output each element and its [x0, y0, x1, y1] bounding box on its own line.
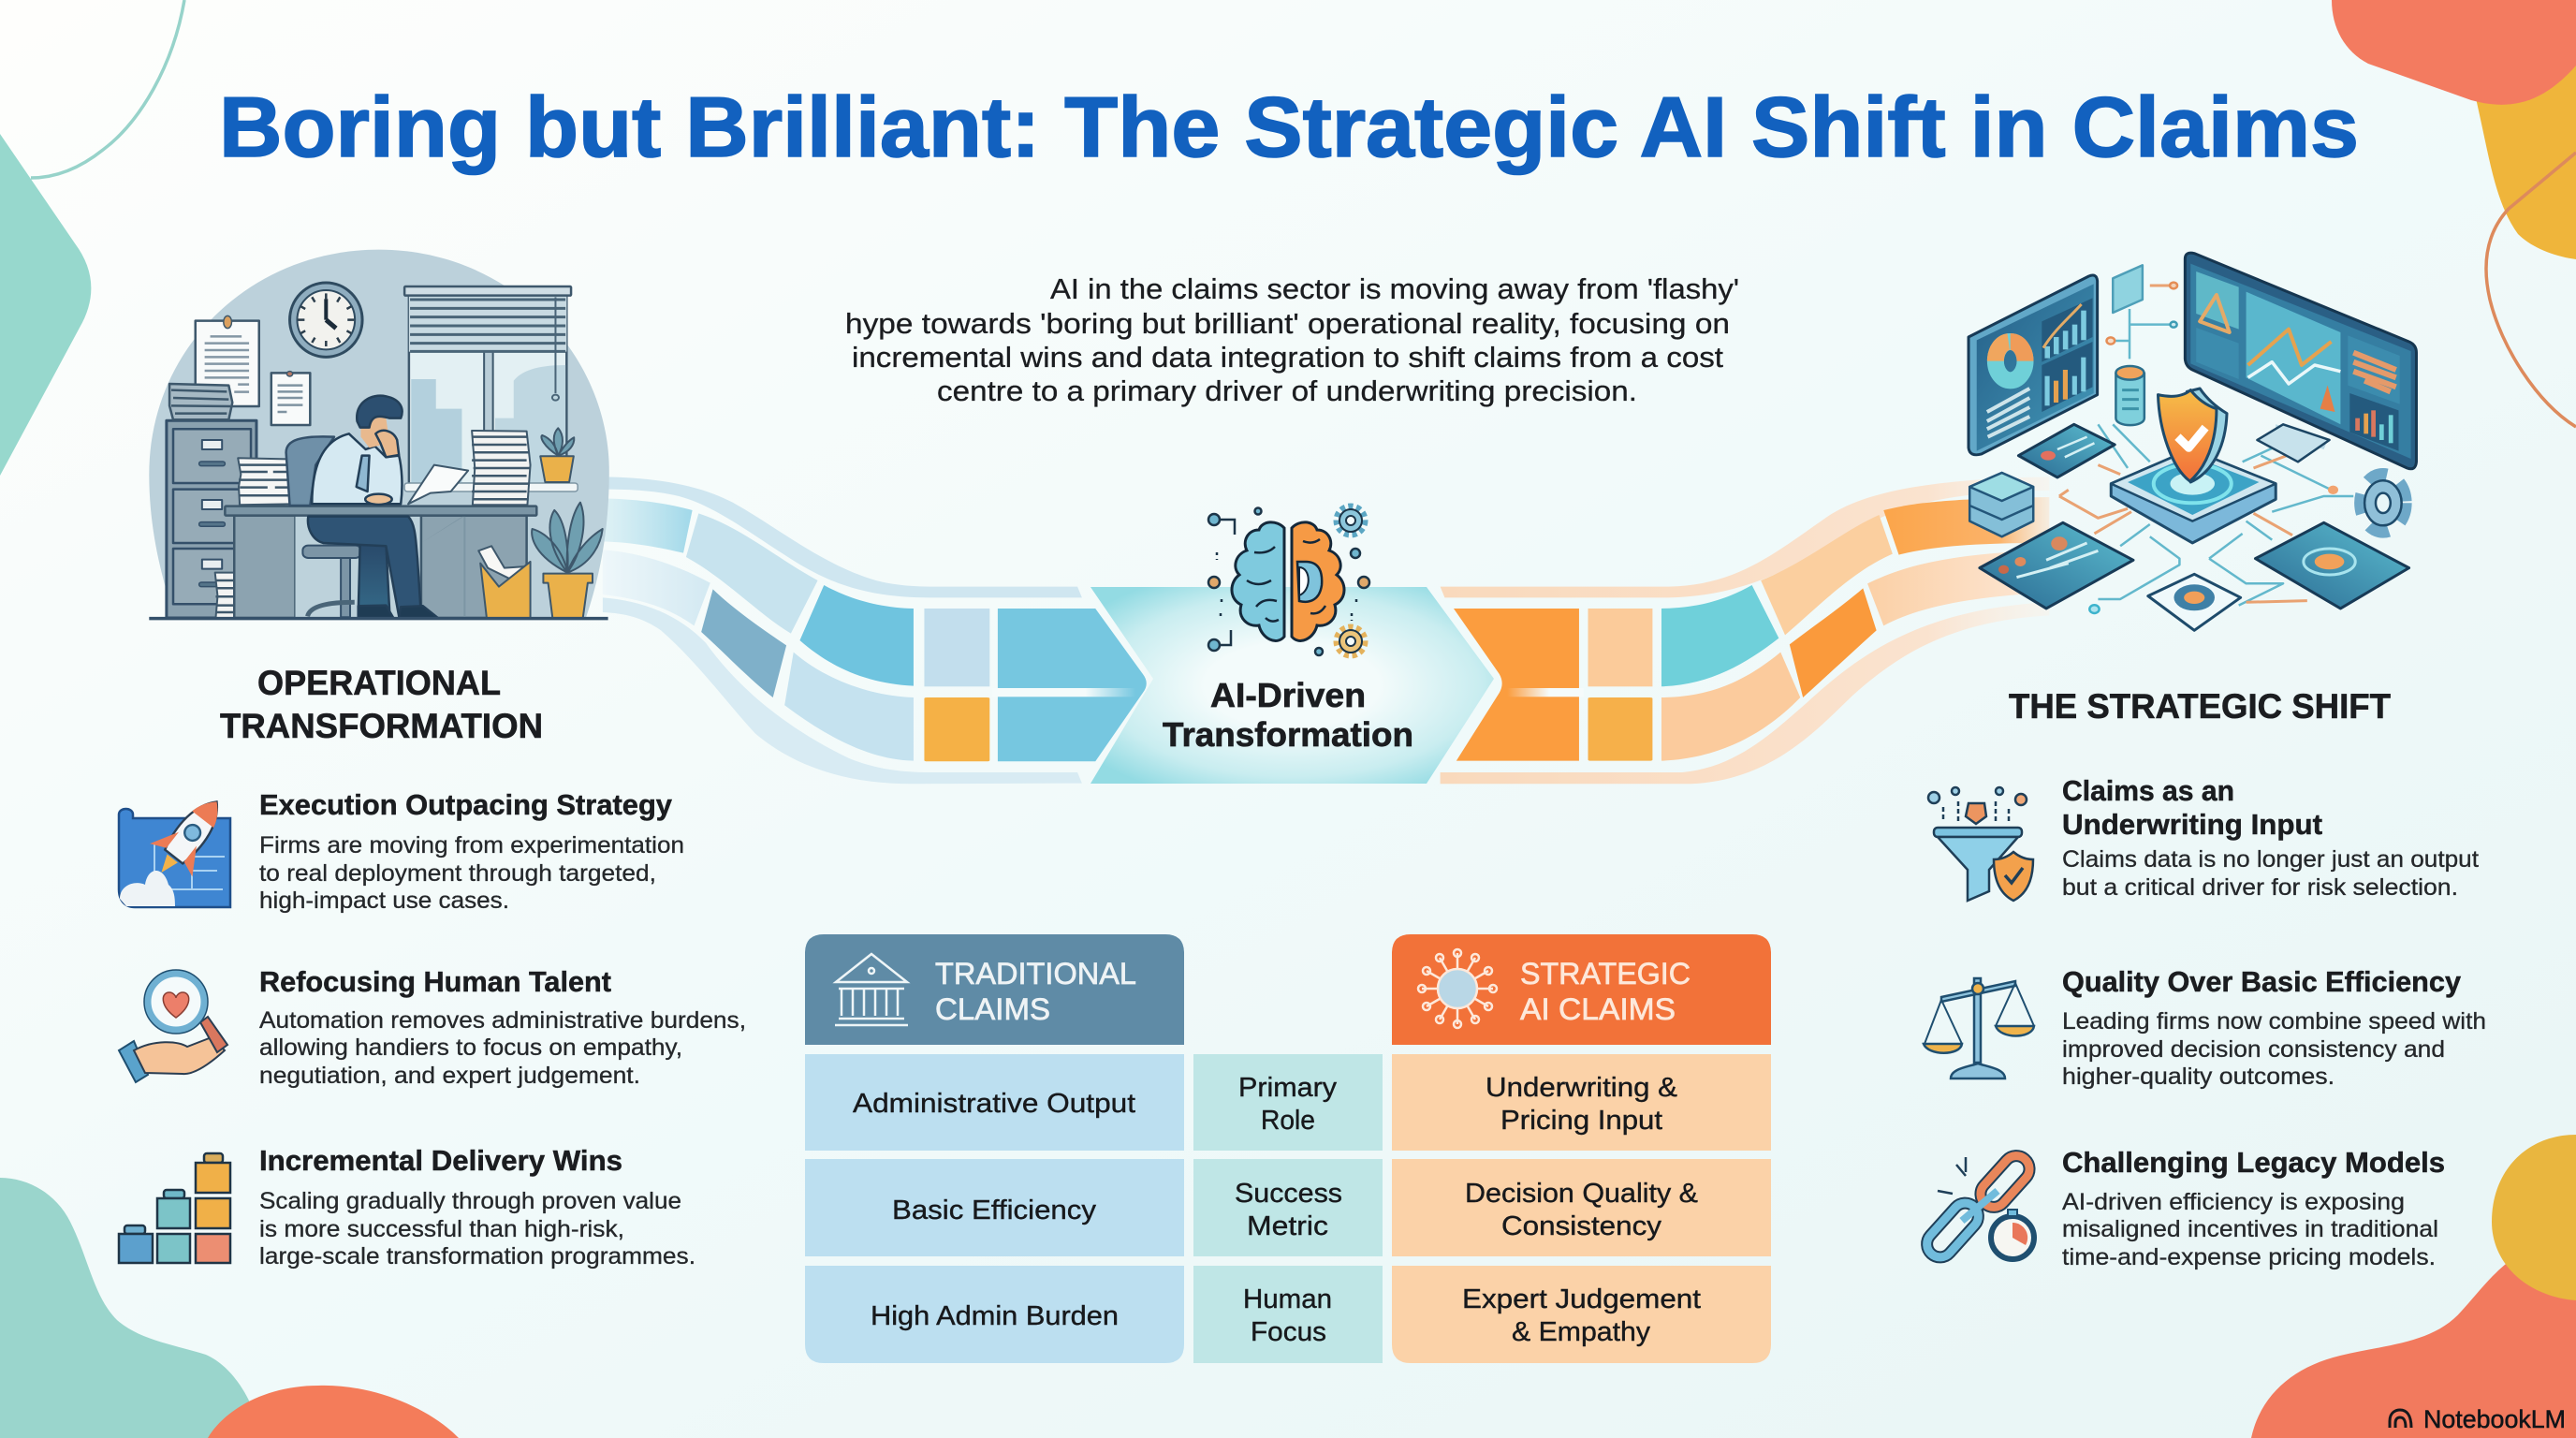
header: traditional claims — [805, 934, 1184, 1045]
circuit lines — [2059, 283, 2353, 613]
security shield — [2158, 389, 2227, 482]
right item: challenging legacy models: time-and-expense pricing models. — [2062, 1244, 2436, 1270]
criteria column cells: Focus — [1251, 1317, 1326, 1347]
office chair — [286, 436, 360, 617]
intro text block: incremental wins and data integration to shift claims from a cost — [852, 341, 1723, 374]
right item: quality over basic efficiency: higher-quality outcomes. — [2062, 1064, 2334, 1090]
left item: execution outpacing strategy: Execution Outpacing Strategy — [259, 788, 673, 821]
strategic column cells: Decision Quality & — [1465, 1179, 1698, 1209]
traditional column cells: Basic Efficiency — [892, 1196, 1097, 1225]
center label — [1163, 676, 1413, 754]
waste bin — [478, 546, 531, 618]
traditional column cells: High Admin Burden — [871, 1301, 1119, 1331]
right item: quality over basic efficiency: Quality Over Basic Efficiency — [2062, 965, 2462, 998]
heading: the strategic shift: THE STRATEGIC SHIFT — [2009, 687, 2391, 726]
heading: operational transformation — [220, 664, 543, 745]
small gear card — [2148, 574, 2241, 630]
icon: rocket on blueprint — [119, 785, 238, 907]
window plant — [540, 428, 574, 482]
right item: challenging legacy models: AI-driven efficiency is exposing — [2062, 1189, 2405, 1215]
left item: refocusing human talent: negutiation, and expert judgement. — [259, 1063, 640, 1089]
title: Boring but Brilliant: The Strategic AI Shift in Claims — [219, 81, 2359, 175]
criteria column cells: Human — [1243, 1284, 1332, 1314]
right item: claims as an underwriting input: but a critical driver for risk selection. — [2062, 874, 2458, 901]
right item: claims as an underwriting input — [1928, 774, 2479, 901]
header: strategic AI claims: STRATEGIC — [1520, 957, 1690, 990]
left item: refocusing human talent: Automation removes administrative burdens, — [259, 1007, 746, 1034]
center label: Transformation — [1163, 715, 1413, 754]
traditional column cells — [805, 1054, 1184, 1363]
tablet top — [2018, 424, 2115, 477]
small memo — [271, 372, 310, 425]
illustration: AI claims tech platform — [1969, 253, 2416, 630]
comparison table — [805, 934, 1771, 1363]
icon: balance scale — [1924, 978, 2034, 1078]
strategic column cells: Consistency — [1501, 1211, 1662, 1241]
right item: challenging legacy models — [1922, 1146, 2445, 1270]
icon: AI brain with circuits — [1208, 506, 1369, 655]
flow band: traditional (blue) — [603, 477, 1147, 784]
header: traditional claims: TRADITIONAL — [935, 957, 1136, 990]
stacked server cube — [1969, 473, 2033, 536]
icon: bank — [835, 954, 908, 1025]
header: strategic AI claims: AI CLAIMS — [1520, 992, 1676, 1026]
traditional column cells: Administrative Output — [853, 1089, 1135, 1119]
icon: network globe — [1418, 949, 1497, 1028]
icon: stacked blocks — [119, 1153, 230, 1263]
paper in hand — [408, 465, 468, 504]
criteria column cells: Role — [1261, 1106, 1315, 1136]
data cylinder — [2115, 366, 2144, 425]
NotebookLM logo: NotebookLM — [2423, 1405, 2566, 1433]
paper stacks — [169, 384, 531, 618]
right item: quality over basic efficiency — [1924, 965, 2486, 1090]
left item: execution outpacing strategy: Firms are moving from experimentation — [259, 832, 684, 858]
filing cabinet — [167, 420, 256, 618]
right item: challenging legacy models: Challenging Legacy Models — [2062, 1146, 2445, 1179]
intro text block: centre to a primary driver of underwriting precision. — [937, 374, 1637, 407]
floor plant — [532, 503, 603, 618]
center label: AI-Driven — [1210, 676, 1366, 714]
desk — [225, 506, 536, 618]
intro text block — [845, 272, 1739, 407]
left item: execution outpacing strategy: high-impact use cases. — [259, 888, 509, 914]
strategic column cells: Pricing Input — [1500, 1106, 1662, 1136]
header: traditional claims: CLAIMS — [935, 992, 1050, 1026]
window and blinds — [404, 286, 578, 492]
right item: claims as an underwriting input: Claims data is no longer just an output — [2062, 846, 2479, 873]
heading: operational transformation: TRANSFORMATION — [220, 707, 543, 745]
strategic column cells: Underwriting & — [1486, 1073, 1677, 1103]
left item: execution outpacing strategy: to real deployment through targeted, — [259, 860, 656, 887]
left item: incremental delivery wins: large-scale transformation programmes. — [259, 1243, 695, 1269]
small data card — [2113, 265, 2143, 313]
right item: claims as an underwriting input: Underwriting Input — [2062, 808, 2322, 841]
criteria column cells: Metric — [1247, 1211, 1328, 1241]
left item: refocusing human talent: Refocusing Human Talent — [259, 965, 611, 998]
left item: incremental delivery wins: Incremental Delivery Wins — [259, 1144, 622, 1177]
left item: execution outpacing strategy — [119, 785, 684, 914]
right item: claims as an underwriting input: Claims as an — [2062, 774, 2234, 807]
header: strategic AI claims — [1392, 934, 1771, 1045]
criteria column cells: Success — [1235, 1179, 1342, 1209]
person — [308, 396, 438, 618]
intro text block: AI in the claims sector is moving away from 'flashy' — [1050, 272, 1739, 305]
right monitor — [2185, 253, 2416, 469]
left item: incremental delivery wins: is more successful than high-risk, — [259, 1216, 624, 1242]
left dashboard screen — [1969, 275, 2098, 455]
right item: challenging legacy models: misaligned incentives in traditional — [2062, 1216, 2438, 1242]
bottom right tablet — [2255, 522, 2409, 609]
left item: incremental delivery wins — [119, 1144, 695, 1269]
pinned notice — [196, 315, 259, 406]
icon: funnel with shield — [1928, 787, 2033, 901]
bottom left tablet — [1980, 522, 2133, 609]
left item: incremental delivery wins: Scaling gradually through proven value — [259, 1188, 681, 1214]
icon: heart under magnifier on hand — [119, 970, 227, 1082]
strategic column cells: Expert Judgement — [1462, 1284, 1701, 1314]
wall clock — [290, 283, 362, 357]
criteria column cells: Primary — [1238, 1073, 1338, 1103]
center AI panel — [1090, 587, 1494, 784]
right item: quality over basic efficiency: improved decision consistency and — [2062, 1036, 2445, 1063]
icon: chain link and stopwatch — [1922, 1151, 2035, 1263]
intro text block: hype towards 'boring but brilliant' operational reality, focusing on — [845, 307, 1730, 340]
illustration: overwhelmed claims handler at desk — [149, 250, 609, 619]
strategic column cells: & Empathy — [1512, 1317, 1651, 1347]
strategic column cells — [1392, 1054, 1771, 1363]
criteria column cells — [1193, 1054, 1383, 1363]
gear — [2363, 477, 2404, 530]
central processor base — [2111, 449, 2276, 543]
heading: operational transformation: OPERATIONAL — [257, 664, 501, 702]
right item: quality over basic efficiency: Leading firms now combine speed with — [2062, 1008, 2486, 1034]
left item: refocusing human talent: allowing handiers to focus on empathy, — [259, 1034, 682, 1061]
flow band: strategic (orange) — [1441, 477, 2049, 784]
left item: refocusing human talent — [119, 965, 746, 1089]
